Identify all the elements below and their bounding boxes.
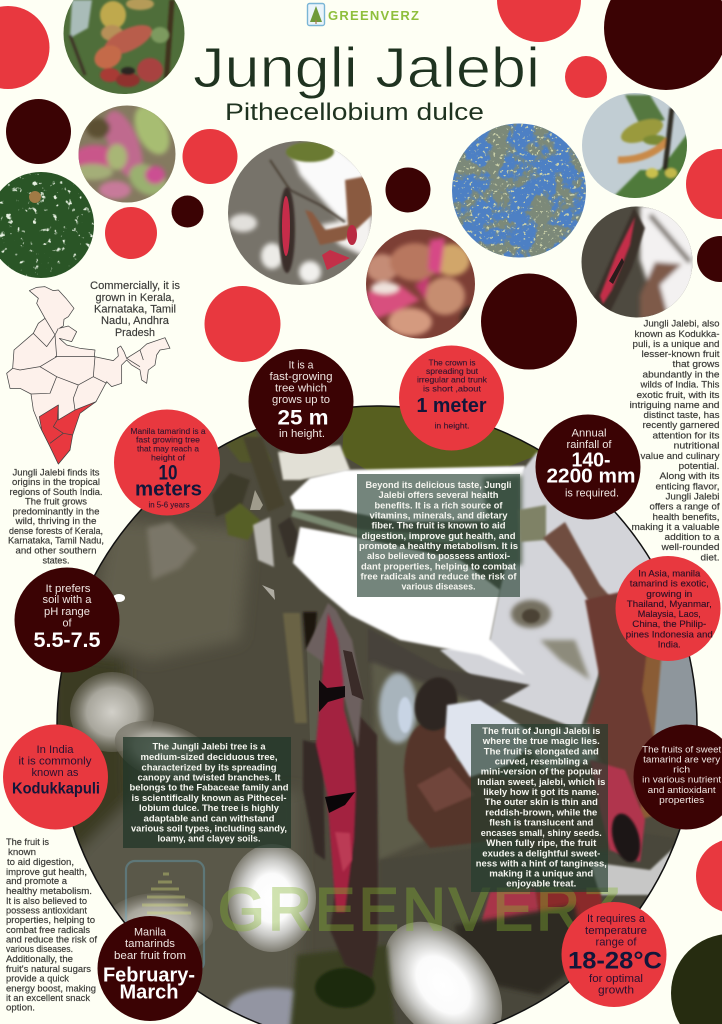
callout: annual rainfall: is required. <box>565 488 619 500</box>
callout: known as Kodukkapuli: Kodukkapuli <box>12 780 100 797</box>
text: introduction to Jungli Jalebi: recently garnered <box>642 419 720 430</box>
text: introduction to Jungli Jalebi: intriguing name and <box>630 399 720 410</box>
callout: growing in Asia: Malaysia, Laos, <box>638 609 701 620</box>
text: fruit nutrition and energy: It is also believed to <box>6 895 87 906</box>
callout: annual rainfall: 2200 mm <box>546 465 636 487</box>
panel: the fruit: flesh is translucent and <box>489 817 593 828</box>
callout: fruiting season: tamarinds <box>125 938 175 950</box>
callout: crown and trunk 1 meter: spreading but <box>426 367 479 376</box>
callout: temperature range: growth <box>598 984 634 996</box>
callout: growing in Asia <box>616 556 720 661</box>
photo: tree against blue sky <box>450 122 588 260</box>
panel: health benefits: promote a healthy metabolism. It is <box>359 541 518 552</box>
photo: red pod with bokeh <box>226 140 376 290</box>
callout: sweet tamarind nutrients <box>634 724 722 830</box>
subtitle: Pithecellobium dulce <box>225 99 484 126</box>
text: fruit nutrition and energy: it an excellent snack <box>6 992 90 1003</box>
text: fruit nutrition and energy: The fruit is <box>6 836 49 847</box>
panel: the fruit: encases small, shiny seeds. <box>481 828 602 839</box>
callout: sweet tamarind nutrients: and antioxidant <box>648 785 716 796</box>
panel: health benefits: dant properties, helping to combat <box>361 561 517 572</box>
callout: growing in Asia: India. <box>658 640 681 650</box>
text: introduction to Jungli Jalebi: value and culinary <box>640 450 720 461</box>
logo: Greenverz <box>308 4 419 26</box>
callout: temperature range <box>562 902 666 1007</box>
text: fruit nutrition and energy: improve gut health, <box>6 866 87 877</box>
photo: ripe pods on branch <box>64 0 184 94</box>
panel: the fruit: ness with a hint of tanginess, <box>476 858 607 869</box>
callout: manila tamarind 10 meters: height of <box>151 453 186 462</box>
panel: health benefits: Jalebi offers several health <box>378 490 499 501</box>
callout: known as Kodukkapuli <box>3 724 108 830</box>
callout: growing in Asia: growing in <box>646 589 692 600</box>
callout: soil pH range <box>14 568 120 672</box>
text: fruit nutrition and energy: combat free radicals <box>6 924 90 935</box>
callout: soil pH range: soil with a <box>42 594 92 606</box>
callout: tree height 25 m: tree which <box>275 382 327 394</box>
callout: tree height 25 m: grows up to <box>272 394 330 406</box>
text: origins in South India: states. <box>42 554 70 566</box>
callout: annual rainfall: Annual <box>572 428 606 440</box>
text: introduction to Jungli Jalebi: lesser-known fruit <box>642 348 720 359</box>
callout: manila tamarind 10 meters: meters <box>135 478 202 500</box>
panel: the tree: is scientifically known as Pithecel- <box>132 793 286 804</box>
callout: fruiting season <box>98 916 202 1021</box>
panel: the fruit: When fully ripe, the fruit <box>486 838 597 849</box>
text: commercial growing states: Pradesh <box>115 327 155 339</box>
callout: tree height 25 m: It is a <box>288 360 314 372</box>
callout: annual rainfall: rainfall of <box>566 439 612 451</box>
central pod <box>303 603 378 978</box>
panel: the fruit: where the true magic lies. <box>482 736 600 747</box>
text: introduction to Jungli Jalebi: wilds of India. This <box>639 378 720 390</box>
callout: growing in Asia: China, the Philip- <box>632 619 706 630</box>
text: fruit nutrition and energy: and promote a <box>6 875 68 886</box>
text: fruit nutrition and energy <box>6 836 97 1012</box>
panel: the fruit: The fruit is elongated and <box>484 746 599 757</box>
callout: growing in Asia: pines Indonesia and <box>626 630 713 640</box>
text: introduction to Jungli Jalebi: attention for its <box>652 430 720 440</box>
text: origins in South India: Karnataka, Tamil Nadu, <box>8 534 104 546</box>
main photo outline <box>57 406 697 1024</box>
callout: fruiting season: bear fruit from <box>114 950 186 962</box>
callout: growing in Asia: In Asia, manila <box>638 568 701 580</box>
text: introduction to Jungli Jalebi: distinct taste, has <box>644 409 720 420</box>
callout: crown and trunk 1 meter: 1 meter <box>416 395 487 417</box>
callout: soil pH range: It prefers <box>46 583 90 595</box>
panel: health benefits: fiber. The fruit is known to aid <box>372 521 506 532</box>
callout: tree height 25 m: fast-growing <box>270 371 333 383</box>
panel: the fruit: reddish-brown, while the <box>485 807 597 818</box>
text: fruit nutrition and energy: properties, helping to <box>6 914 95 925</box>
watermark: GREENVERZ logo and wordmark: GREENVERZ <box>218 876 620 943</box>
panel: health benefits: free radicals and reduce the risk of <box>360 572 517 582</box>
text: fruit nutrition and energy: Additionally, the <box>6 953 73 964</box>
panel: health benefits: also believed to possess antioxi- <box>367 551 510 562</box>
text: fruit nutrition and energy: option. <box>6 1002 35 1012</box>
callout: manila tamarind 10 meters: 10 <box>158 461 178 484</box>
text: fruit nutrition and energy: known <box>8 846 36 857</box>
panel: the tree: lobium dulce. The tree is highly <box>139 803 280 814</box>
callout: crown and trunk 1 meter: in height. <box>434 421 470 430</box>
callout: sweet tamarind nutrients: The fruits of sweet <box>642 744 722 756</box>
panel: the tree: adaptable and can withstand <box>144 813 275 824</box>
text: introduction to Jungli Jalebi: potential. <box>678 460 720 471</box>
text: introduction to Jungli Jalebi: nutritional <box>674 440 720 450</box>
callout: known as Kodukkapuli: it is commonly <box>18 756 92 768</box>
callout: manila tamarind 10 meters: in 5-6 years <box>148 500 190 509</box>
callout: temperature range: 18-28°C <box>568 947 662 974</box>
photo: pink and green pods <box>78 106 176 202</box>
callout: temperature range: temperature <box>585 925 647 937</box>
main circular photo: pods and branches <box>50 400 710 1024</box>
callout: fruiting season: Manila <box>134 926 166 938</box>
text: introduction to Jungli Jalebi: offers a range of <box>650 500 720 512</box>
text: commercial growing states <box>90 280 181 339</box>
logo: Greenverz: GREENVERZ <box>328 8 419 23</box>
panel: the fruit: The fruit of Jungli Jalebi is <box>482 726 600 737</box>
panel: the tree <box>123 737 291 848</box>
callout: growing in Asia: tamarind is exotic, <box>630 578 709 590</box>
text: commercial growing states: Karnataka, Tamil <box>94 304 176 316</box>
panel: the tree: various soil types, including sandy, <box>131 823 287 834</box>
callout: temperature range: It requires a <box>587 913 645 925</box>
dark decorative circles <box>6 0 722 370</box>
text: introduction to Jungli Jalebi: exotic fruit, with its <box>636 389 720 400</box>
text: introduction to Jungli Jalebi <box>630 318 720 562</box>
panel: the fruit: Indian sweet, jalebi, which is <box>477 777 605 788</box>
callout: known as Kodukkapuli: known as <box>32 767 78 779</box>
callout: crown and trunk 1 meter: irregular and trunk <box>417 376 488 385</box>
panel: the tree: The Jungli Jalebi tree is a <box>152 742 266 753</box>
text: fruit nutrition and energy: provide a quick <box>6 972 69 984</box>
text: origins in South India: predominantly in the <box>12 506 100 516</box>
callout: soil pH range: pH range <box>44 606 90 618</box>
watermark: GREENVERZ logo and wordmark <box>126 861 620 971</box>
callout: manila tamarind 10 meters: that may reach a <box>137 445 199 454</box>
callout: sweet tamarind nutrients: tamarind are very <box>643 754 720 766</box>
callout: sweet tamarind nutrients: rich <box>673 764 690 776</box>
text: introduction to Jungli Jalebi: health benefits, <box>652 511 720 522</box>
text: introduction to Jungli Jalebi: diet. <box>700 552 720 562</box>
callout: crown and trunk 1 meter: The crown is <box>428 358 476 367</box>
callout: manila tamarind 10 meters: Manila tamarind is a <box>130 427 206 436</box>
text: introduction to Jungli Jalebi: puli, is a unique and <box>632 338 720 349</box>
text: commercial growing states: Commercially, it is <box>90 280 181 292</box>
photo: opened pod with seeds <box>580 205 695 320</box>
panel: the fruit: curved, resembling a <box>495 756 588 767</box>
panel: the fruit: mini-version of the popular <box>481 767 602 778</box>
callout: soil pH range: 5.5-7.5 <box>34 629 101 652</box>
text: fruit nutrition and energy: and reduce the risk of <box>6 934 97 944</box>
text: introduction to Jungli Jalebi: enticing flavor, <box>656 480 720 492</box>
callout: sweet tamarind nutrients: properties <box>659 795 704 806</box>
photo: ripe pink fruits <box>366 230 475 338</box>
text: fruit nutrition and energy: healthy metabolism. <box>6 885 92 896</box>
panel: the tree: belongs to the Fabaceae family and <box>130 783 289 794</box>
callout: crown and trunk 1 meter: is short ,about <box>423 384 482 393</box>
text: introduction to Jungli Jalebi: Jungli Jalebi <box>666 490 720 502</box>
panel: the tree: loamy, and clayey soils. <box>158 834 260 845</box>
callout: manila tamarind 10 meters: fast growing tree <box>136 436 200 445</box>
callout: annual rainfall <box>536 414 640 520</box>
text: introduction to Jungli Jalebi: well-rounded <box>660 541 720 552</box>
text: origins in South India: dense forests of Kerala, <box>9 525 103 536</box>
text: introduction to Jungli Jalebi: that grows <box>672 358 720 369</box>
panel: health benefits: vitamins, minerals, and dietary <box>370 510 508 522</box>
map of India with southern states highlighted <box>7 287 170 464</box>
text: fruit nutrition and energy: various diseases. <box>6 943 73 954</box>
panel: the fruit: The outer skin is thin and <box>485 797 598 808</box>
text: origins in South India: The fruit grows <box>25 496 87 506</box>
callout: temperature range: for optimal <box>589 973 643 985</box>
photo: tree canopy <box>0 170 97 282</box>
text: origins in South India: origins in the tropical <box>12 476 100 487</box>
text: origins in South India: wild, thriving in the <box>14 515 97 526</box>
photo: green and orange pods on pale sky <box>582 93 687 198</box>
callout: known as Kodukkapuli: In India <box>36 744 74 756</box>
text: introduction to Jungli Jalebi: known as Kodukka- <box>634 328 720 339</box>
panel: health benefits: digestion, improve gut health, and <box>362 531 516 542</box>
text: introduction to Jungli Jalebi: making it a valuable <box>632 521 720 532</box>
callout: growing in Asia: Thailand, Myanmar, <box>627 599 712 610</box>
callout: tree height 25 m <box>248 349 354 454</box>
text: introduction to Jungli Jalebi: addition to a <box>664 531 720 542</box>
text: origins in South India: regions of South India. <box>10 486 102 497</box>
text: fruit nutrition and energy: energy boost, making <box>6 982 96 994</box>
text: commercial growing states: grown in Kerala, <box>96 292 174 304</box>
panel: health benefits: benefits. It is a rich source of <box>374 500 503 511</box>
panel: the fruit: making it a unique and <box>489 869 593 880</box>
panel: the fruit: exudes a delightful sweet- <box>482 848 600 859</box>
panel: the fruit: enjoyable treat. <box>506 879 576 890</box>
panel: the tree: canopy and twisted branches. It <box>138 773 281 784</box>
callout: crown and trunk 1 meter <box>399 346 504 450</box>
callout: soil pH range: of <box>62 618 72 630</box>
text: fruit nutrition and energy: fruit's natural sugars <box>6 963 91 974</box>
text: origins in South India: Jungli Jalebi finds its <box>12 466 100 478</box>
callout: manila tamarind 10 meters <box>114 410 220 516</box>
panel: the tree: characterized by its spreading <box>142 762 277 773</box>
dark green corner circle <box>671 934 722 1024</box>
callout: annual rainfall: 140- <box>572 450 610 472</box>
panel: health benefits <box>357 474 520 597</box>
panel: health benefits: various diseases. <box>402 582 476 593</box>
callout: sweet tamarind nutrients: in various nutrient <box>642 774 722 786</box>
callout: fruiting season: March <box>120 981 178 1003</box>
panel: health benefits: Beyond its delicious taste, Jungli <box>366 480 512 491</box>
text: origins in South India <box>8 466 104 566</box>
callout: temperature range: range of <box>596 936 637 948</box>
text: introduction to Jungli Jalebi: Along with its <box>660 470 720 481</box>
panel: the fruit <box>471 724 608 892</box>
title: Jungli Jalebi <box>193 36 540 100</box>
text: introduction to Jungli Jalebi: abundantly in the <box>642 368 720 380</box>
callout: fruiting season: February- <box>103 965 195 987</box>
text: fruit nutrition and energy: to aid digestion, <box>7 856 74 867</box>
panel: the tree: medium-sized deciduous tree, <box>140 752 278 763</box>
panel: the fruit: likely how it got its name. <box>483 787 599 798</box>
callout: tree height 25 m: in height. <box>279 428 325 440</box>
text: origins in South India: and other southern <box>16 544 96 556</box>
text: fruit nutrition and energy: possess antioxidant <box>6 904 87 916</box>
text: introduction to Jungli Jalebi: Jungli Jalebi, also <box>644 318 720 328</box>
callout: tree height 25 m: 25 m <box>278 406 328 430</box>
text: commercial growing states: Nadu, Andhra <box>101 315 170 327</box>
